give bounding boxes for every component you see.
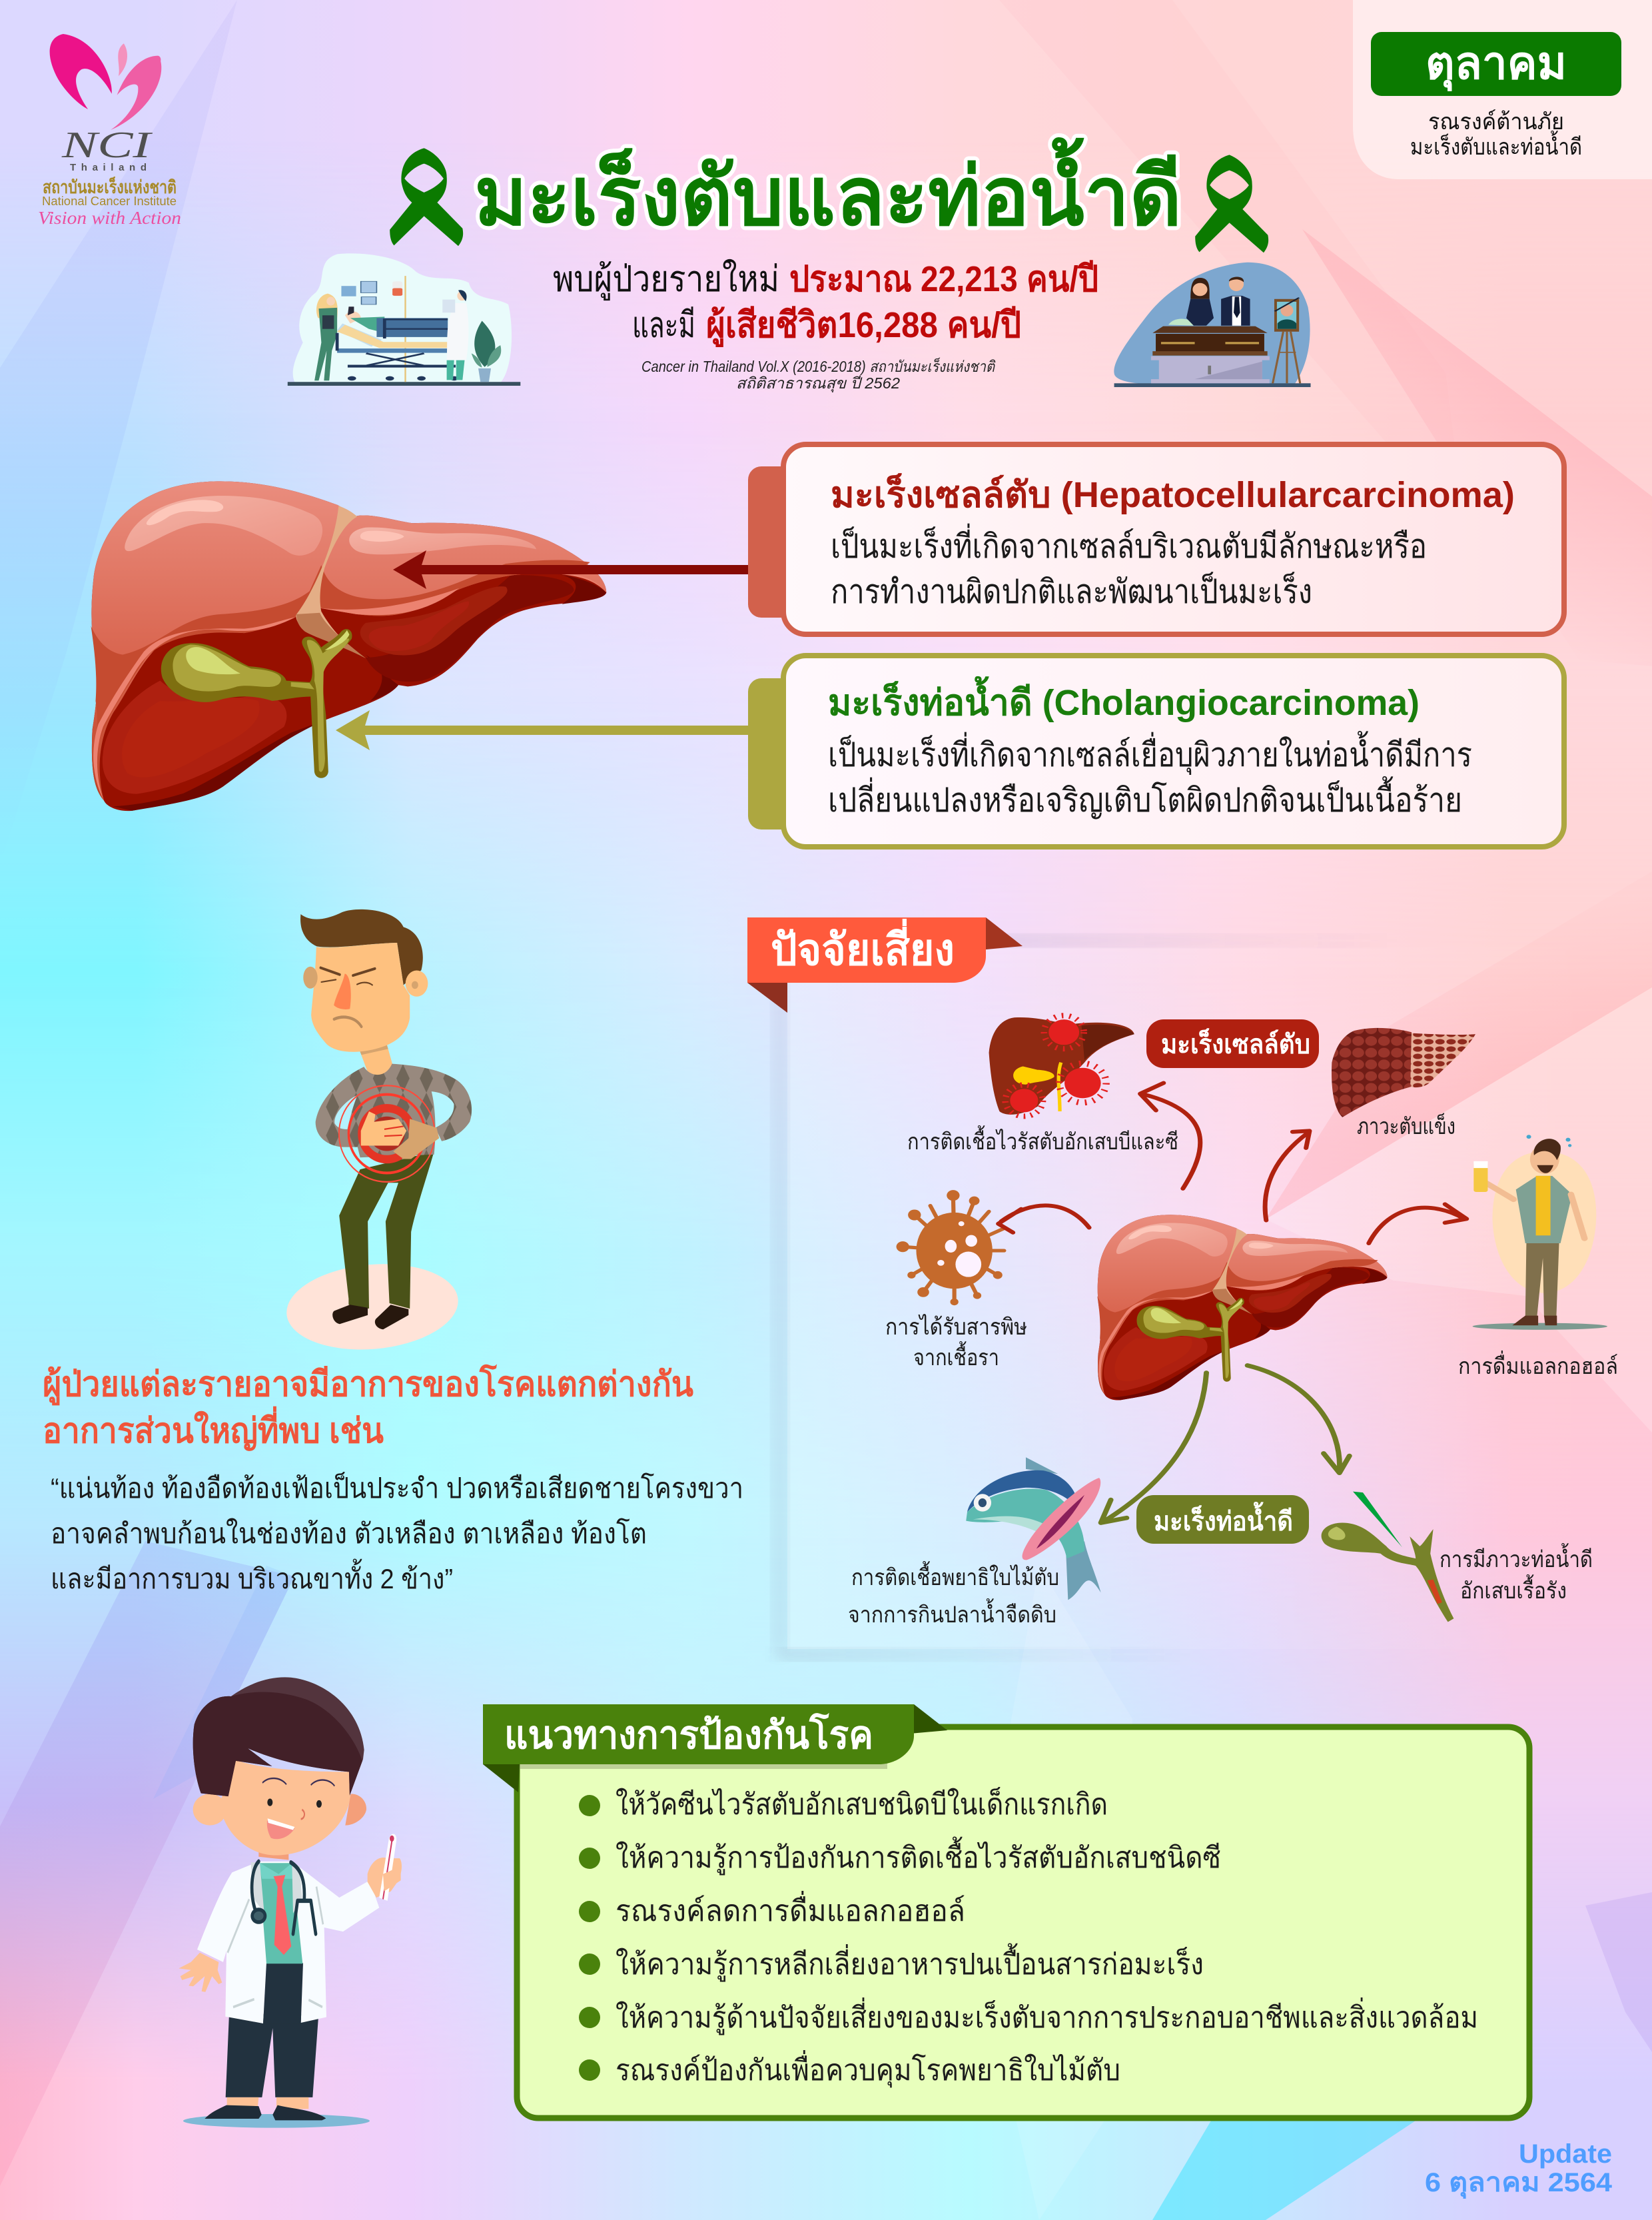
risk captions: การติดเชื้อไวรัสตับอักเสบบีและซี bbox=[907, 1125, 1178, 1155]
source note: Cancer in Thailand Vol.X (2016-2018) สถาบันมะเร็งแห่งชาติ bbox=[641, 357, 996, 375]
logo: National Cancer Institute: NCI bbox=[61, 125, 153, 166]
subtitle: deaths: ผู้เสียชีวิต16,288 คน/ปี bbox=[706, 305, 1021, 347]
panel: hepatocellular carcinoma: การทำงานผิดปกติและพัฒนาเป็นมะเร็ง bbox=[831, 572, 1312, 610]
month panel bbox=[1353, 0, 1652, 179]
logo: National Cancer Institute: Vision with Action bbox=[38, 208, 181, 228]
heading: symptoms: ผู้ป่วยแต่ละรายอาจมีอาการของโรคแตกต่างกัน bbox=[43, 1363, 693, 1406]
logo: National Cancer Institute: National Cancer Institute bbox=[42, 195, 177, 208]
panel: cholangiocarcinoma: เป็นมะเร็งที่เกิดจากเซลล์เยื่อบุผิวภายในท่อน้ำดีมีการ bbox=[828, 731, 1472, 775]
risk captions: การดื่มแอลกอฮอล์ bbox=[1458, 1351, 1618, 1379]
risk captions: จากการกินปลาน้ำจืดดิบ bbox=[848, 1598, 1056, 1628]
panel: prevention guidelines: ให้ความรู้ด้านปัจจัยเสี่ยงของมะเร็งตับจากการประกอบอาชีพและสิ่งแวดล้อม bbox=[616, 1997, 1478, 2035]
icon: fish with liver fluke bbox=[966, 1457, 1101, 1600]
update date: Update bbox=[1519, 2139, 1612, 2169]
icon: cirrhosis liver bbox=[1332, 1028, 1475, 1117]
label: hepatocellular: มะเร็งเซลล์ตับ bbox=[1161, 1027, 1310, 1059]
risk captions: ภาวะตับแข็ง bbox=[1357, 1113, 1455, 1139]
month panel: รณรงค์ต้านภัย bbox=[1428, 109, 1564, 135]
panel: hepatocellular carcinoma: เป็นมะเร็งที่เกิดจากเซลล์บริเวณตับมีลักษณะหรือ bbox=[831, 524, 1427, 565]
risk captions: จากเชื้อรา bbox=[913, 1341, 999, 1371]
icon: right green ribbon bbox=[1195, 155, 1268, 253]
arrow: to bile duct bbox=[336, 710, 748, 750]
label: bile duct: มะเร็งท่อน้ำดี bbox=[1154, 1502, 1293, 1536]
liver illustration: central bbox=[1097, 1215, 1388, 1400]
label: bile duct bbox=[1136, 1495, 1309, 1544]
icon: man drinking alcohol bbox=[1473, 1135, 1607, 1330]
title: มะเร็งตับและท่อน้ำดี bbox=[474, 137, 1182, 242]
panel: prevention guidelines: รณรงค์ลดการดื่มแอลกอฮอล์ bbox=[616, 1890, 965, 1928]
subtitle: new patients bbox=[553, 259, 1098, 300]
arrow: to fungal toxin bbox=[999, 1205, 1089, 1233]
risk heading ribbon: ปัจจัยเสี่ยง bbox=[771, 918, 955, 974]
panel: prevention guidelines: ให้ความรู้การหลีกเลี่ยงอาหารปนเปื้อนสารก่อมะเร็ง bbox=[616, 1943, 1204, 1982]
text block: symptoms quote: และมีอาการบวม บริเวณขาทั้ง 2 ข้าง” bbox=[51, 1558, 453, 1594]
text block: symptoms quote: “แน่นท้อง ท้องอืดท้องเฟ้อเป็นประจำ ปวดหรือเสียดชายโครงขวา bbox=[51, 1472, 743, 1504]
update date bbox=[1425, 2139, 1613, 2199]
label: hepatocellular bbox=[1146, 1019, 1319, 1068]
icon: inflamed bile duct bbox=[1322, 1492, 1453, 1622]
subtitle: new patients: ประมาณ 22,213 คน/ปี bbox=[789, 259, 1098, 299]
month panel: มะเร็งตับและท่อน้ำดี bbox=[1410, 131, 1582, 160]
logo: National Cancer Institute: Thailand bbox=[70, 162, 147, 173]
illustration: hospital bed bbox=[288, 253, 520, 386]
risk diagram icons and arrows bbox=[897, 1015, 1607, 1622]
panel: cholangiocarcinoma: มะเร็งท่อน้ำดี (Cholangiocarcinoma) bbox=[828, 676, 1420, 723]
logo: National Cancer Institute: สถาบันมะเร็งแห่งชาติ bbox=[43, 175, 177, 197]
risk captions: อักเสบเรื้อรัง bbox=[1460, 1574, 1567, 1604]
risk captions bbox=[848, 1113, 1618, 1628]
panel: hepatocellular carcinoma: มะเร็งเซลล์ตับ (Hepatocellularcarcinoma) bbox=[831, 474, 1515, 515]
risk captions: การได้รับสารพิษ bbox=[885, 1314, 1027, 1340]
arrow: to cirrhosis bbox=[1265, 1131, 1310, 1221]
text block: symptoms quote bbox=[51, 1472, 743, 1594]
heading: symptoms bbox=[43, 1363, 693, 1451]
arrow: to liver fluke bbox=[1101, 1373, 1206, 1523]
panel: hepatocellular carcinoma bbox=[748, 444, 1564, 634]
subtitle: new patients: พบผู้ป่วยรายใหม่ bbox=[553, 259, 779, 300]
month panel: ตุลาคม bbox=[1426, 38, 1567, 91]
source note bbox=[641, 357, 996, 392]
icon: infected liver bbox=[989, 1015, 1134, 1116]
panel: risk factors bbox=[747, 917, 1620, 1660]
panel: prevention guidelines: รณรงค์ป้องกันเพื่อควบคุมโรคพยาธิใบไม้ตับ bbox=[616, 2049, 1120, 2088]
liver illustration: large bbox=[91, 481, 606, 811]
illustration: doctor bbox=[179, 1677, 402, 2128]
logo: National Cancer Institute bbox=[38, 34, 181, 228]
panel: prevention guidelines: ให้วัคซีนไวรัสตับอักเสบชนิดบีในเด็กแรกเกิด bbox=[616, 1787, 1108, 1821]
risk captions: การติดเชื้อพยาธิใบไม้ตับ bbox=[851, 1561, 1059, 1590]
arrow: to alcohol bbox=[1369, 1204, 1467, 1243]
subtitle: deaths: และมี bbox=[632, 305, 695, 345]
panel: cholangiocarcinoma bbox=[748, 656, 1564, 847]
update date: 6 ตุลาคม 2564 bbox=[1425, 2168, 1613, 2199]
arrow: to hepatocellular liver bbox=[393, 550, 748, 589]
icon: fungal toxin bbox=[897, 1190, 1004, 1305]
prevention heading ribbon bbox=[483, 1704, 947, 1792]
text block: symptoms quote: อาจคลำพบก้อนในช่องท้อง ตัวเหลือง ตาเหลือง ท้องโต bbox=[51, 1517, 647, 1549]
illustration: man with stomach pain bbox=[284, 909, 472, 1356]
arrow: to virus infection bbox=[1140, 1083, 1200, 1189]
risk heading ribbon bbox=[747, 917, 1023, 1013]
prevention heading ribbon: แนวทางการป้องกันโรค bbox=[504, 1712, 873, 1757]
heading: symptoms: อาการส่วนใหญ่ที่พบ เช่น bbox=[43, 1406, 384, 1451]
prevention bullet list bbox=[579, 1795, 600, 2081]
arrow: to cholangitis bbox=[1248, 1365, 1350, 1473]
panel: prevention guidelines: ให้ความรู้การป้องกันการติดเชื้อไวรัสตับอักเสบชนิดซี bbox=[616, 1836, 1221, 1876]
icon: left green ribbon bbox=[390, 148, 463, 246]
panel: cholangiocarcinoma: เปลี่ยนแปลงหรือเจริญเติบโตผิดปกติจนเป็นเนื้อร้าย bbox=[828, 776, 1462, 819]
source note: สถิติสาธารณสุข ปี 2562 bbox=[736, 374, 900, 392]
illustration: funeral bbox=[1114, 263, 1311, 387]
risk captions: การมีภาวะท่อน้ำดี bbox=[1440, 1543, 1593, 1572]
panel: prevention guidelines bbox=[483, 1704, 1529, 2118]
